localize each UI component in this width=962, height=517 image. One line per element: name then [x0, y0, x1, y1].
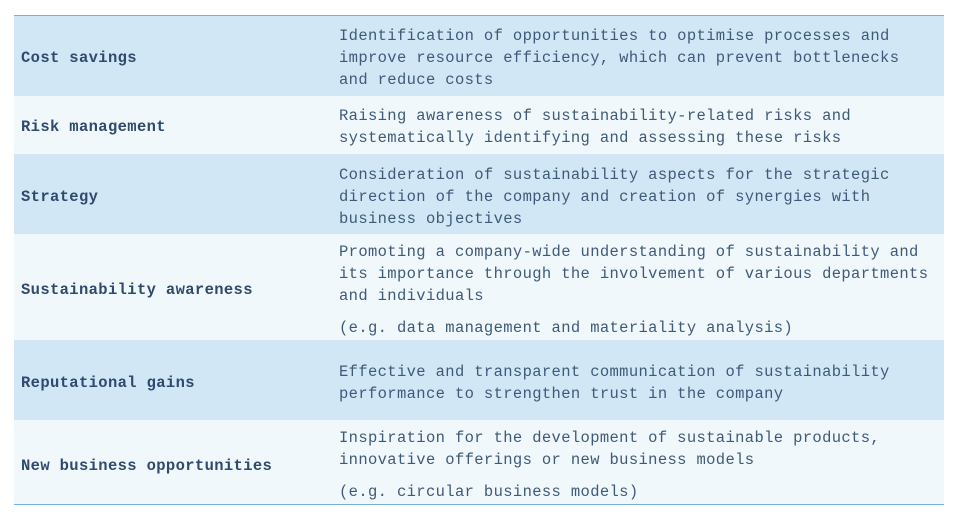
row: cost savings: [14, 16, 944, 96]
row: new business opportunities: [14, 420, 944, 504]
text: risk management description: Raising awareness of sustainability-related risks and systematically identifying and assessing these risks: [339, 107, 851, 147]
text: sustainability awareness example: (e.g. data management and materiality analysis): [339, 319, 793, 337]
label: strategy: Strategy: [21, 188, 98, 206]
text: cost savings description: Identification of opportunities to optimise processes and improve resource efficiency, which can prevent bottlenecks and reduce costs: [339, 27, 899, 89]
row: reputational gains: [14, 340, 944, 420]
table top rule: [14, 15, 944, 16]
label: risk management: Risk management: [21, 118, 166, 136]
label: reputational gains: Reputational gains: [21, 374, 195, 392]
label: sustainability awareness: Sustainability awareness: [21, 281, 253, 299]
text: reputational gains description: Effective and transparent communication of sustainability performance to strengthen trust in the company: [339, 363, 890, 403]
text: strategy description: Consideration of sustainability aspects for the strategic direction of the company and creation of synergies with business objectives: [339, 166, 890, 228]
text: new business opportunities description: Inspiration for the development of sustainable products, innovative offerings or new business models: [339, 429, 880, 469]
row: risk management: [14, 96, 944, 154]
row: sustainability awareness: [14, 234, 944, 340]
label: new business opportunities: New business opportunities: [21, 457, 272, 475]
text: new business opportunities example: (e.g. circular business models): [339, 483, 639, 501]
table bottom rule: [14, 504, 944, 505]
row: strategy: [14, 154, 944, 234]
label: cost savings: Cost savings: [21, 49, 137, 67]
text: sustainability awareness description: Promoting a company-wide understanding of sustainability and its importance through the involvement of various departments and individuals: [339, 243, 928, 305]
